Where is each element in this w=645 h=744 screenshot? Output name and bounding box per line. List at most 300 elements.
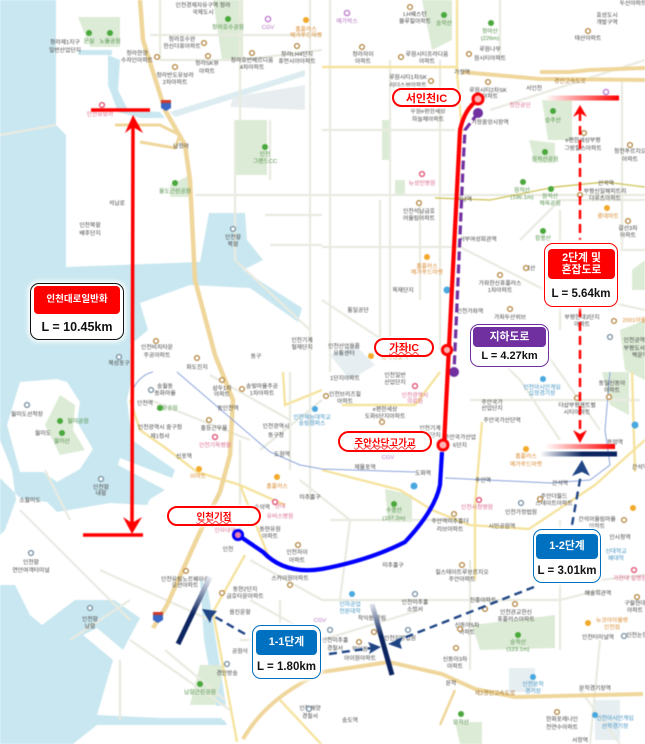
labels: general places: 효성도시 xyxy=(596,11,618,19)
labels: hospitals: 청천공단 xyxy=(509,101,531,109)
labels: general places: 청라호반베르디움 xyxy=(231,56,274,64)
labels: shopping: 롯데마트 xyxy=(597,212,619,220)
labels: general places: 소방서 xyxy=(407,605,423,613)
length: 5.64km: L = 5.64km xyxy=(552,288,610,300)
labels: shopping: 홈플러스 xyxy=(416,262,438,270)
callout: Juan industrial overpass xyxy=(338,431,432,452)
labels: general places: 루원시티2차SK xyxy=(469,86,507,94)
labels: general places: 경찰서 xyxy=(327,644,343,652)
length: 3.01km: L = 3.01km xyxy=(538,565,596,577)
labels: shopping: 홈플러스 xyxy=(266,482,288,490)
labels: parks: 남항근린공원 xyxy=(184,688,216,696)
labels: hospitals: 인천기독병원 xyxy=(199,441,231,449)
labels: hospitals: 뉴성민병원 xyxy=(409,179,435,187)
labels: general places: 인천관교한신 xyxy=(500,608,532,616)
labels: general places: 태산아파트 xyxy=(575,34,602,42)
labels: parks: 청마산 xyxy=(482,27,499,35)
labels: hospitals xyxy=(87,101,645,582)
labels: general places: 블루힐아파트 xyxy=(399,17,432,25)
labels: general places: 주안더월드 xyxy=(541,492,568,500)
labels: shopping: 이마트 xyxy=(190,472,207,480)
labels: general places: 송월동 xyxy=(157,382,174,390)
labels: general places: 6단지 xyxy=(453,441,467,449)
labels: general places: 금호타운아파트 xyxy=(226,592,264,600)
pale blue blocks xyxy=(330,345,620,740)
labels: parks: 승학산 xyxy=(436,19,453,27)
labels: general places: 인천유림노르웨이숲 xyxy=(161,575,210,583)
labels: general places: 주공아파트 xyxy=(144,351,171,359)
labels: general places: 아파트 xyxy=(589,522,606,530)
labels: general places: 더샵부평센트럴 xyxy=(558,401,596,409)
labels: public and sports: 송림캠퍼스 xyxy=(299,419,326,427)
yellow roads xyxy=(130,0,645,744)
labels: parks: 원적산공원 xyxy=(532,155,558,163)
labels: general places: 인천광역시 xyxy=(263,422,289,430)
labels: general places: 경인방송 xyxy=(216,669,238,677)
labels: general places: 일반산업단지 xyxy=(49,46,81,54)
labels: general places: 아파트 xyxy=(214,390,231,398)
labels: shopping: 메가푸드마켓 xyxy=(290,31,322,39)
labels: general places: 아파트 xyxy=(355,57,372,65)
node: Incheon start xyxy=(233,530,243,540)
labels: general places: 인천석남금호 xyxy=(403,207,436,215)
labels: general places: 인천가정법원 xyxy=(505,508,537,516)
labels: shopping: 메가푸드마켓 xyxy=(411,268,443,276)
labels: general places: 인천북항 xyxy=(79,221,101,229)
labels: general places: 힐스테이트루브르지오 xyxy=(435,568,489,576)
labels: hospitals: 인천유보라 xyxy=(87,110,114,118)
labels: general places: 도화5단지아파트 xyxy=(365,412,406,420)
labels: general places: 아이원아파트 xyxy=(344,654,377,662)
labels: general places: 인천기계 xyxy=(291,336,313,344)
labels: general places: 월미도선착장 xyxy=(11,410,44,418)
labels: general places: 숭의역 xyxy=(254,503,270,511)
map icons: shops xyxy=(196,17,636,626)
labels: general places: 공원삭 xyxy=(232,647,249,655)
labels: general places: 통일공단 xyxy=(347,306,369,314)
callout: Seoincheon IC: 서인천IC xyxy=(406,92,447,104)
labels: general places: 인천미추홀 xyxy=(402,598,429,606)
labels: hospitals: 인하대역 xyxy=(214,526,236,534)
labels: general places: 동화마을 xyxy=(154,389,176,397)
railway: Seoknam line xyxy=(435,182,645,200)
labels: general places: 하늘채아파트 xyxy=(412,115,445,123)
labels: parks: (196.1m) xyxy=(510,195,534,201)
map icons: public facilities xyxy=(25,227,626,711)
labels: parks: 온실 xyxy=(84,37,94,45)
labels: general places: 신동아5차 xyxy=(455,621,480,629)
labels: general places: 아파트 xyxy=(289,556,306,564)
route highway shields xyxy=(153,100,171,623)
labels: general places: 청라SK뷰 xyxy=(195,59,220,67)
labels: general places: 연안여객터미널 xyxy=(12,566,50,574)
labels: general places: 삼두1차 xyxy=(212,384,232,392)
labels: general places: 루원시티1차SK xyxy=(389,73,427,81)
labels: general places: 동구 xyxy=(251,353,262,360)
map icons: blue landmarks xyxy=(312,286,638,718)
labels: general places: 화도진지 xyxy=(186,363,208,371)
labels: general places: 1차아파트 xyxy=(488,286,513,294)
labels: hospitals: 인천시청병원 xyxy=(461,503,493,511)
labels: general places: 간석역 xyxy=(552,479,568,487)
labels: general places: 목재단지 xyxy=(392,286,414,294)
labels: general places: LH웨스턴 xyxy=(403,10,427,18)
map icons: apartment rings xyxy=(154,5,639,714)
labels: general places: 북성포구 xyxy=(108,359,130,367)
labels: public and sports: 인천재능대학교 xyxy=(293,413,331,421)
labels: general places: 주안아파트 xyxy=(449,575,476,583)
labels: parks: 그랜드CC xyxy=(253,157,277,165)
labels: general places: 인천일반 xyxy=(384,371,406,379)
south land strip xyxy=(73,725,240,744)
labels: general places: 인천지방법원 xyxy=(384,634,416,642)
labels: general places: 서부여성회관역 xyxy=(459,235,497,243)
labels: general places: 도원역 xyxy=(274,450,290,458)
labels: general places: 동현2단지 xyxy=(233,585,257,593)
labels: public and sports: 인하공업 xyxy=(339,600,361,608)
labels: general places: 동현유원 xyxy=(259,525,281,533)
labels: general places: 도화역 xyxy=(415,469,431,477)
route: tunnel purple dashed xyxy=(449,108,483,377)
labels: general places: 시티아파트 xyxy=(564,408,591,416)
labels: general places: 인천역 xyxy=(137,399,153,407)
map icons: hospitals xyxy=(100,103,636,572)
labels: cinema xyxy=(262,17,394,624)
labels: general places: 남청라 xyxy=(173,142,190,150)
heading: Incheon-daero: 인천대로일반화 xyxy=(46,294,108,305)
labels: shopping: 홈타일플렉 xyxy=(382,353,408,361)
labels: parks: 율도근린공원 xyxy=(159,187,191,195)
canal: pale channel xyxy=(170,70,305,117)
land: ferry terminal connection xyxy=(25,505,150,600)
labels: parks: 노을공원 xyxy=(99,37,121,45)
labels: general places: 1단지아파트 xyxy=(330,374,361,382)
labels: general places: 아파트 xyxy=(337,397,354,405)
heading: stage 1-2 xyxy=(536,534,598,559)
labels: general places: 4차아파트 xyxy=(240,63,265,71)
labels: public and sports: 전문대학 xyxy=(339,607,361,615)
labels: hospitals: 인천광역시 xyxy=(402,391,428,399)
heading: Incheon-daero xyxy=(34,286,120,314)
labels: general places: 인천광역시 중구청 xyxy=(138,423,182,431)
water: canal and strips xyxy=(78,50,226,725)
labels: general places: 우원e편한세상 xyxy=(410,107,446,115)
labels: shopping: 뉴코아아울렛 xyxy=(596,616,628,624)
labels: general places: 청라제1지구 xyxy=(50,38,81,46)
labels: parks: 자유공원 xyxy=(156,404,178,412)
labels: general places: 원시티아파트 xyxy=(474,54,507,62)
labels: parks: 월미산 xyxy=(54,437,71,445)
labels: general places: 청라한양 xyxy=(126,49,148,57)
labels: general places: 부평현대3단지 xyxy=(564,313,600,321)
dimension: Incheon-daero red arrow xyxy=(83,110,150,535)
labels: general places: 유통센터 xyxy=(333,349,355,357)
route: blue section xyxy=(238,452,442,570)
labels: general places: 제물포역 xyxy=(354,463,376,471)
labels: general places: 산곡역 xyxy=(598,179,614,187)
water: pale basin xyxy=(230,85,305,110)
length: 1.80km: L = 1.80km xyxy=(257,661,316,673)
labels: parks: 월미공원 xyxy=(67,417,89,425)
labels: general places: 용진운항 xyxy=(229,608,251,616)
labels: hospitals: 현대 xyxy=(275,502,285,510)
labels: general places: 소월미도 xyxy=(19,496,41,504)
route: red section xyxy=(444,100,478,445)
labels: general places: 서인천 xyxy=(526,84,542,92)
map icons: parks xyxy=(57,12,556,717)
dimension: stage 2 dashed arrow xyxy=(545,96,619,449)
labels: parks xyxy=(54,19,562,726)
labels: public and sports: 십정경기장 xyxy=(529,389,556,397)
labels: shopping: 메가푸드마켓 xyxy=(510,460,542,468)
labels: parks: 인천 xyxy=(260,150,270,158)
labels: general places: 인천항 xyxy=(82,615,99,623)
labels: general places: 미추홀구 xyxy=(382,561,404,569)
labels: parks: 원적산 xyxy=(542,192,559,200)
labels: general places: 진흥아파트 xyxy=(470,596,497,604)
labels: general places: 갈산3차 xyxy=(618,224,638,232)
labels: general places: 남항 xyxy=(85,622,96,630)
heading: stage 2 xyxy=(548,249,615,279)
heading: stage 1-1: 1-1단계 xyxy=(269,636,304,648)
labels: general places: 홍등근우물 xyxy=(201,424,228,432)
labels: parks: (123.1m) xyxy=(506,647,530,653)
labels: general places: 주안역미추홀더 xyxy=(431,517,469,525)
heading: stage 1-2: 1-2단계 xyxy=(549,540,585,552)
labels: general places: 아파트 xyxy=(604,386,621,394)
labels: cinema: CGV xyxy=(262,25,274,31)
labels: general places: e편한세상 xyxy=(373,405,398,413)
labels: general places: 아파트 xyxy=(482,92,499,100)
labels: general places: 아파트 xyxy=(620,231,637,239)
labels: general places: 주안역 xyxy=(475,476,491,484)
labels: general places: 아파트 xyxy=(262,532,279,540)
labels: general places: 인천산업용품 xyxy=(328,342,361,350)
labels: general places: 아파트 xyxy=(199,67,216,75)
callout: Incheon start point: 인천기점 xyxy=(197,512,231,523)
labels: general places: 학익동 xyxy=(352,645,369,653)
labels: general places: 청라자이 xyxy=(352,50,374,58)
labels: general places: 아파트 xyxy=(459,628,476,636)
heading: underpass xyxy=(473,327,546,347)
labels: general places: 어울림아파트 xyxy=(403,214,436,222)
labels: general places: 아파트 xyxy=(574,320,591,328)
labels: general places: 인천경제자유구역 청라 xyxy=(176,1,231,9)
labels: general places: 가좌두산위브 xyxy=(494,313,527,321)
labels: general places: 아파트 xyxy=(447,662,464,670)
labels: general places: 인천비치타운 xyxy=(141,343,174,351)
labels: general places: 인천해양 xyxy=(299,704,321,712)
labels: shopping: 홈플러스 xyxy=(515,452,537,460)
callout: Juan industrial overpass: 주안산단고가교 xyxy=(354,438,416,448)
labels: general places: 경찰서 xyxy=(302,712,318,720)
labels: public and sports: 예대학 xyxy=(608,554,625,562)
labels: parks: 승주산 xyxy=(545,116,562,124)
labels: general places: 1차아파트 xyxy=(250,389,275,397)
labels: parks: (226m) xyxy=(481,36,499,42)
labels: general places: 인천 xyxy=(223,545,233,553)
labels: general places: 부평신일해피트리 xyxy=(584,187,626,195)
labels: general places: 루원나무 xyxy=(479,45,501,53)
labels: hospitals: 의료원 xyxy=(407,397,423,405)
callout: Incheon start point xyxy=(167,506,261,526)
labels: general places: 인시청역 xyxy=(609,533,631,541)
labels: general places: 아파트 xyxy=(622,155,639,163)
labels: general places: 배후단지 xyxy=(79,229,101,237)
labels: general places: 인천터미널역 xyxy=(582,633,614,641)
labels: general places: 송빛마을주공 xyxy=(246,382,279,390)
labels: public and sports: 선학경기장 xyxy=(602,722,629,730)
label: expressway names xyxy=(475,77,587,697)
heading: stage 2: 2단계 및 xyxy=(562,252,601,264)
labels: cinema: CGV xyxy=(314,618,326,624)
labels: general places: 월미도 xyxy=(35,429,52,437)
labels: public and sports: 경기장 xyxy=(525,687,542,695)
labels: general places: 서창역 xyxy=(572,736,588,744)
labels: parks: 원적산 xyxy=(514,186,531,194)
map icons: cinemas xyxy=(265,10,609,95)
labels: cinema: CGV xyxy=(382,455,394,461)
labels: general places: 간석어울림마을 xyxy=(578,515,616,523)
labels: general places: 휴플러스아파트 xyxy=(497,615,535,623)
labels: public and sports: 인천아시안게임 xyxy=(523,383,561,391)
labels: general places: 신동아3차 xyxy=(443,655,468,663)
labels: parks: 체육공원 xyxy=(539,199,561,207)
labels: general places: 루원시티프라디움 xyxy=(406,50,449,58)
labels: general places: 송도역 xyxy=(342,716,358,724)
labels: general places: 석남역 xyxy=(456,195,472,203)
labels: general places: 수자인아파트 xyxy=(121,56,154,64)
node: Juan overpass xyxy=(438,440,448,450)
labels: general places: 인천기계 xyxy=(419,424,441,432)
labels: general places: 벽산 xyxy=(525,264,536,272)
labels: general places: 석남로 xyxy=(109,199,126,207)
labels: general places: 예술회관역 xyxy=(585,589,611,597)
labels: general places: 인천가좌역 xyxy=(457,307,483,315)
labels: general places: 북항 xyxy=(228,240,239,248)
labels: general places: 리더스뷰아파트 xyxy=(389,81,427,89)
labels: general places: 천연수아파트 xyxy=(546,723,579,731)
labels: general places: 개발구역 xyxy=(596,18,618,26)
labels: parks: 문학산 xyxy=(453,718,470,726)
labels: general places: 아파트 xyxy=(627,606,644,614)
labels: general places: 시민공원역 xyxy=(489,522,515,530)
main land mass xyxy=(0,285,298,744)
labels: parks: 수봉산 xyxy=(386,506,403,514)
labels: general places: 신포역 xyxy=(176,452,192,460)
panel: Incheon-daero 10.45km xyxy=(30,283,124,340)
labels: general places: 동암역 xyxy=(607,438,623,446)
panel: stage 1-2 3.01km xyxy=(533,529,601,583)
labels: parks: 청라호수공원 xyxy=(212,23,244,31)
labels: general places: 휴먼시아아파트 xyxy=(278,57,316,65)
sea and harbour water xyxy=(0,0,302,744)
labels: general places: 2차아파트 xyxy=(163,78,188,86)
heading: stage 1-1 xyxy=(256,630,317,655)
labels: general places: 철재단지 xyxy=(291,343,313,351)
panel: stage 2 5.64km xyxy=(544,243,618,307)
callout: Seoincheon IC xyxy=(392,88,461,107)
panel: stage 1-1 1.80km xyxy=(252,625,321,679)
labels: general places: 주안국가 xyxy=(481,398,503,406)
labels: general places: 청라호수완 xyxy=(169,35,196,43)
labels: parks: (107.2m) xyxy=(382,516,406,522)
labels: general places: 아파트 xyxy=(419,57,436,65)
heading: underpass: 지하도로 xyxy=(490,331,529,343)
labels: shopping xyxy=(190,25,645,631)
labels: general places: 학익동 풍림 xyxy=(358,614,386,622)
labels: general places: 국제도시 xyxy=(192,8,214,16)
node: Gajwa IC xyxy=(442,345,452,355)
labels: general places: 인천미추홀 xyxy=(322,636,349,644)
label: expressway names: 경인고속도로 xyxy=(554,77,587,85)
labels: general places: 리브아파트 xyxy=(437,525,464,533)
labels: general places: 내항 xyxy=(96,489,107,497)
labels: general places: e편한세상부평 xyxy=(565,136,601,144)
labels: general places: 동구청 xyxy=(268,431,284,439)
labels: general places: 산업단지 xyxy=(481,404,503,412)
length: 4.27km: L = 4.27km xyxy=(481,350,538,362)
labels: cinema: 메가박스 xyxy=(336,17,358,25)
labels: shopping: 홈플러스 xyxy=(295,25,317,33)
labels: general places: 스테이트아파트 xyxy=(535,499,573,507)
labels: general places: 인천항 xyxy=(23,558,40,566)
stage boundary: navy bars xyxy=(178,452,617,675)
labels: hospitals: 유비스병원 xyxy=(267,512,293,520)
labels: general places: 동인천역 xyxy=(217,404,239,412)
labels: general places: 한화포레나인 xyxy=(546,715,578,723)
labels: public and sports: 인천아시안게임 xyxy=(596,714,634,722)
labels: public and sports xyxy=(293,383,634,730)
labels: general places: 주안국가산업 xyxy=(444,433,476,441)
callout: Gajwa IC: 가좌IC xyxy=(389,342,419,354)
labels: public and sports: 인천문학 xyxy=(522,680,544,688)
labels: general places: 한신더휴아파트 xyxy=(163,42,201,50)
labels: general places: 청라LH4단지 xyxy=(281,50,313,58)
labels: general places: 가정중앙시장역 xyxy=(471,118,509,126)
labels: general places: 문학경기장역 xyxy=(579,684,611,692)
labels: general places: 스카이원아파트 xyxy=(271,574,309,582)
labels: general places: 주안국가산단역 xyxy=(483,416,521,424)
labels: general places: 인천자이 xyxy=(286,548,308,556)
labels: general places: 제1청사 xyxy=(150,432,170,440)
labels: parks: 승학산 xyxy=(510,638,527,646)
labels: general places: 산업단지 xyxy=(384,378,406,386)
labels: general places: 동일신동아 xyxy=(599,379,626,387)
heading: stage 2: 혼잡도로 xyxy=(562,264,601,276)
callout: Gajwa IC xyxy=(374,338,434,357)
labels: general places: 문학 xyxy=(446,679,457,687)
labels: parks: 함봉산 xyxy=(535,234,552,242)
length: 10.45km: L = 10.45km xyxy=(41,320,112,334)
node: Seoincheon IC xyxy=(473,94,483,104)
subway lines xyxy=(133,372,610,483)
labels: general places: 청라반도유보라 xyxy=(156,71,194,79)
labels: general places: 미추홀구 xyxy=(299,493,321,501)
labels: general places: 가정역 xyxy=(454,68,470,76)
labels: shopping: 인천점 xyxy=(604,623,620,631)
labels: general places: 인천항 xyxy=(93,483,110,491)
labels: general places: 오션아파트 xyxy=(172,581,199,589)
island: Wolmido xyxy=(7,379,93,482)
dashed arrows: stage 1-1 and 1-2 xyxy=(202,460,590,654)
panel: underpass 4.27km xyxy=(470,324,549,367)
label: expressway names: 제2경인고속도로 xyxy=(475,689,516,697)
labels: public and sports: 신대학교 xyxy=(605,547,627,555)
labels: general places: 인천브리즈힐 xyxy=(329,390,361,398)
labels: general places: 그랑힐스아파트 xyxy=(564,144,602,152)
labels: general places: 더루츠아파트 xyxy=(589,194,622,202)
